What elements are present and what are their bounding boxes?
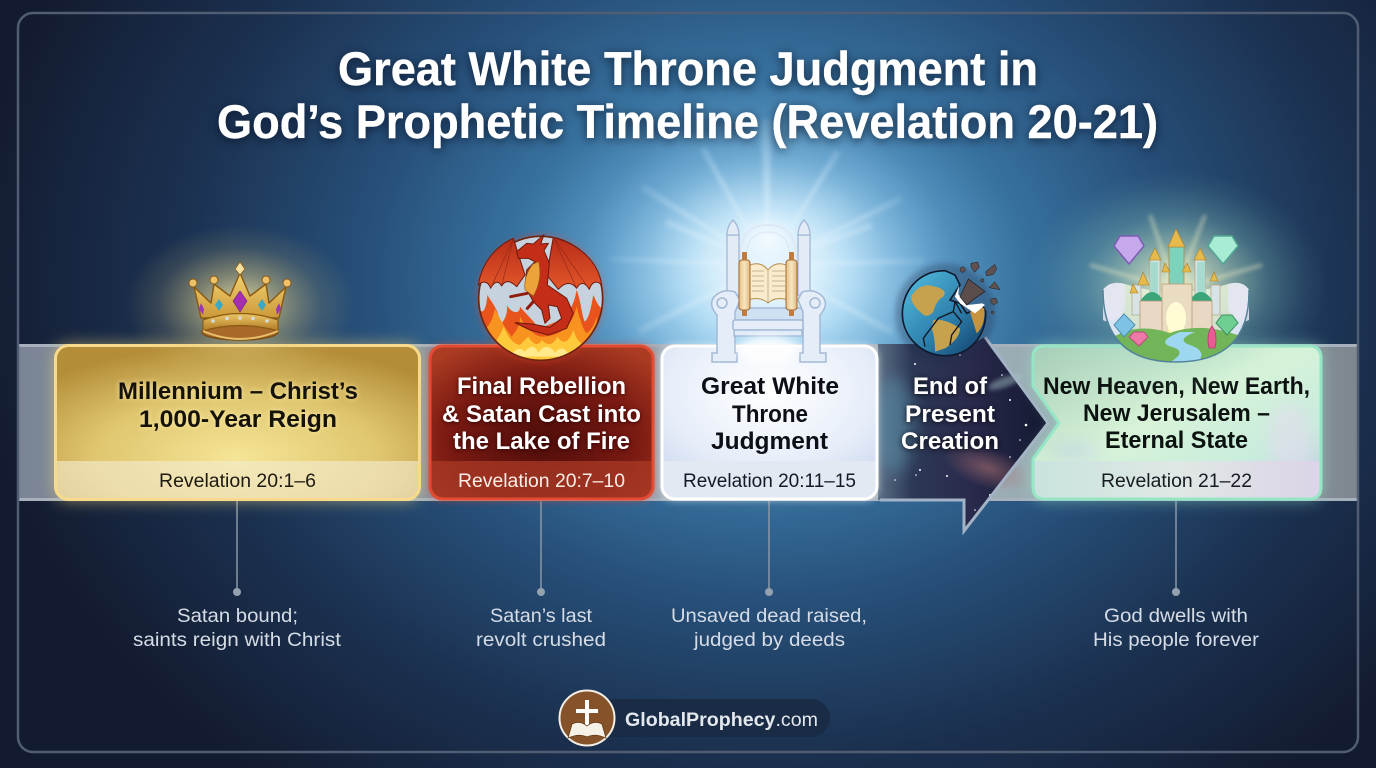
title: God’s Prophetic Timeline (Revelation 20-21) <box>217 95 1158 148</box>
caption: eternal state <box>1093 605 1260 651</box>
caption: judgment <box>671 605 867 651</box>
arrow heading <box>901 373 999 455</box>
heading: 1,000-Year Reign <box>139 406 337 433</box>
panel: final rebellion <box>429 345 654 500</box>
timeline band <box>19 344 1357 501</box>
caption: eternal state: God dwells with <box>1104 605 1248 627</box>
heading <box>1043 373 1310 454</box>
heading: Eternal State <box>1105 427 1248 454</box>
caption: rebellion <box>476 605 606 651</box>
heading: New Heaven, New Earth, <box>1043 373 1310 400</box>
reference: Revelation 20:11–15 <box>683 471 856 492</box>
panel: millennium <box>55 345 420 500</box>
icon: throne with open scroll <box>710 194 826 364</box>
throne glow <box>583 112 953 412</box>
icon: new jerusalem <box>1049 184 1310 390</box>
arrow heading: End of <box>913 373 988 400</box>
heading: New Jerusalem – <box>1083 400 1270 427</box>
caption: judgment: Unsaved dead raised, <box>671 605 867 627</box>
caption: judgment: judged by deeds <box>693 629 845 651</box>
connector: judgment <box>765 500 773 596</box>
panel: end of present creation arrow <box>871 337 1048 533</box>
caption: rebellion: Satan’s last <box>490 605 593 627</box>
caption: millennium: Satan bound; <box>177 605 298 627</box>
title: Great White Throne Judgment in <box>338 42 1038 95</box>
panel: new heaven new earth <box>1032 345 1322 500</box>
connector: rebellion <box>537 500 545 596</box>
heading: Throne <box>732 401 808 428</box>
heading <box>701 373 839 455</box>
title <box>217 42 1158 148</box>
heading <box>118 378 358 433</box>
arrow heading: Present <box>905 401 995 428</box>
heading: Great White <box>701 373 839 400</box>
caption: eternal state: His people forever <box>1093 629 1260 651</box>
caption: millennium: saints reign with Christ <box>133 629 342 651</box>
heading: Millennium – Christ’s <box>118 378 358 405</box>
reference: Revelation 20:7–10 <box>458 471 625 492</box>
panel: great white throne <box>661 345 878 500</box>
reference: Revelation 20:1–6 <box>159 471 316 492</box>
heading: Judgment <box>711 428 828 455</box>
connector: millennium <box>233 500 241 596</box>
connector: eternal state <box>1172 500 1180 596</box>
site name: GlobalProphecy.com <box>625 709 818 731</box>
arrow heading: Creation <box>901 428 999 455</box>
heading: the Lake of Fire <box>453 428 630 455</box>
icon: cross and bible <box>560 690 614 746</box>
footer logo <box>560 690 830 746</box>
light rays behind the throne <box>610 120 925 335</box>
heading <box>442 373 641 455</box>
heading: & Satan Cast into <box>442 401 641 428</box>
icon: dragon in flames <box>476 233 606 363</box>
heading: Final Rebellion <box>457 373 626 400</box>
reference: Revelation 21–22 <box>1101 471 1252 492</box>
caption: rebellion: revolt crushed <box>476 629 606 651</box>
icon: cracked earth <box>895 262 1000 363</box>
caption: millennium <box>133 605 342 651</box>
icon: crown <box>125 225 355 385</box>
